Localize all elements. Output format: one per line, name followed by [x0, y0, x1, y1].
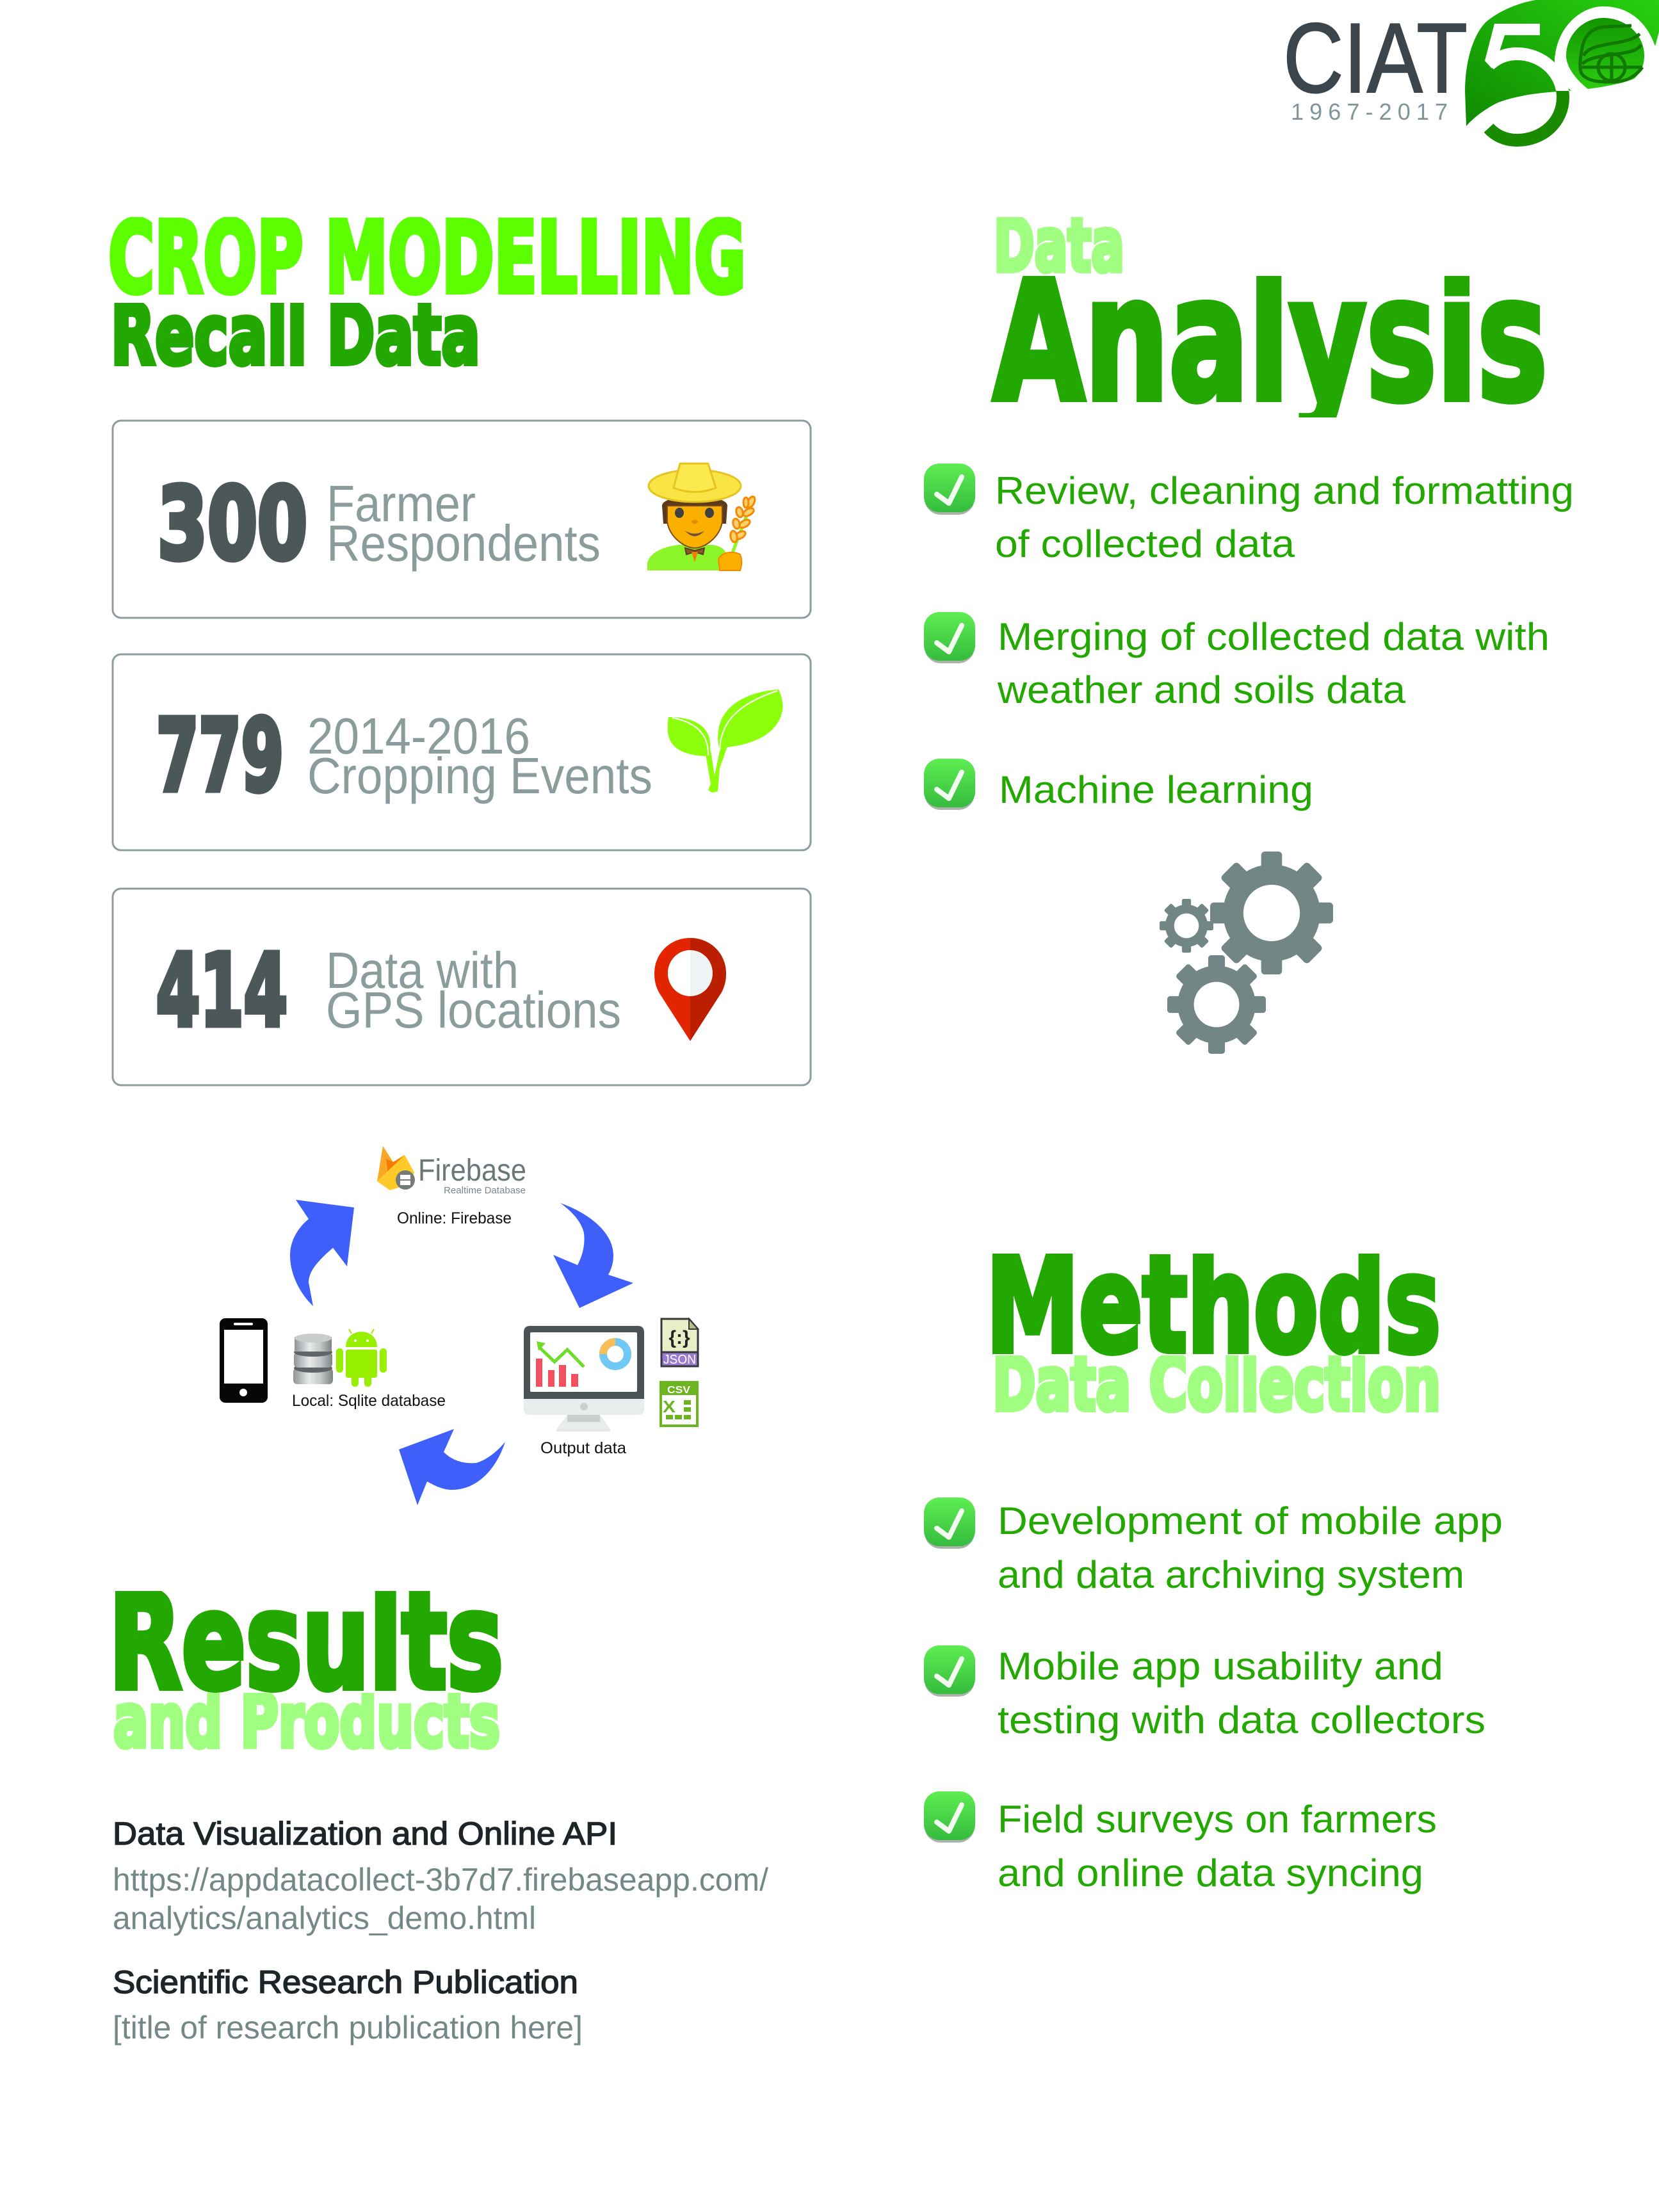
icon: Firebase flame — [377, 1146, 415, 1190]
heading: Methods Data Collection — [992, 1254, 1439, 1414]
icon: farmer — [647, 464, 756, 570]
item: field surveys: Field surveys on farmers — [998, 1798, 1437, 1841]
link text: https://appdatacollect-3b7d7.firebaseapp.com/ — [113, 1862, 768, 1898]
icon: map pin — [654, 938, 726, 1041]
logo five bowl — [1489, 54, 1563, 140]
heading line: Data: Data — [994, 202, 1124, 289]
icon: database — [293, 1334, 333, 1384]
icon: sprout — [668, 690, 783, 793]
icon: monitor with charts — [524, 1326, 644, 1432]
item: machine learning: Machine learning — [999, 768, 1313, 811]
logo five stem — [1485, 24, 1540, 69]
arrow: output to local — [399, 1429, 505, 1505]
heading: Results and Products — [114, 1591, 501, 1750]
icon: phone — [220, 1318, 268, 1403]
caption: Online Firebase: Online: Firebase — [397, 1209, 512, 1227]
icon: JSON file — [661, 1319, 698, 1367]
icon: CSV file: CSV — [667, 1385, 690, 1396]
item: usability — [924, 1645, 1485, 1741]
icon: CSV file — [661, 1382, 697, 1426]
panel: GPS data — [113, 889, 811, 1085]
subheading: data visualization: Data Visualization and Online API — [113, 1816, 617, 1852]
list: data collection steps — [924, 1498, 1503, 1894]
item: development: and data archiving system — [998, 1553, 1464, 1596]
heading line: Data Collection: Data Collection — [992, 1341, 1441, 1428]
heading: Crop Modelling Recall Data — [109, 217, 743, 367]
label: 2014-2016 Cropping Events — [307, 707, 652, 804]
label: Data with GPS locations: Data with — [326, 942, 519, 999]
item: usability: Mobile app usability and — [998, 1645, 1443, 1688]
heading line: Results: Results — [109, 1565, 503, 1720]
item: review: of collected data — [995, 522, 1295, 565]
label: 2014-2016 Cropping Events: Cropping Events — [307, 747, 652, 804]
icon: android — [336, 1329, 387, 1387]
Realtime Database caption: Realtime Database — [444, 1185, 526, 1196]
diagram: data flow cycle — [220, 1146, 698, 1505]
logo globe — [1580, 26, 1642, 82]
item: machine learning — [924, 759, 1313, 811]
item: merging: weather and soils data — [997, 668, 1406, 711]
logo zero ring — [1555, 6, 1655, 92]
label: Farmer Respondents: Respondents — [327, 515, 601, 572]
number 779: 779 — [156, 698, 284, 814]
subheading: publication: Scientific Research Publication — [113, 1964, 578, 2000]
item: field surveys: and online data syncing — [998, 1852, 1423, 1894]
icon: JSON file: JSON — [663, 1353, 696, 1367]
heading line: CROP MODELLING: CROP MODELLING — [108, 201, 746, 316]
label: Farmer Respondents: Farmer — [327, 475, 476, 532]
number 414: 414 — [156, 933, 287, 1049]
heading line: Recall Data: Recall Data — [111, 286, 480, 383]
item: merging — [924, 612, 1550, 711]
number 300: 300 — [158, 466, 307, 582]
item: review — [924, 464, 1574, 565]
panel: cropping events — [113, 654, 811, 850]
label: Farmer Respondents — [327, 475, 601, 572]
heading line: and Products: and Products — [113, 1678, 500, 1764]
icon: CSV file: X — [663, 1397, 676, 1416]
icon: JSON file: {:} — [668, 1327, 690, 1348]
publication placeholder: [title of research publication here] — [113, 2010, 583, 2046]
logo years: 1967-2017 — [1291, 99, 1448, 125]
arrow: online to output — [553, 1203, 633, 1308]
label: Data with GPS locations — [326, 942, 621, 1038]
link text — [113, 1862, 768, 1936]
Firebase wordmark: Firebase — [418, 1154, 526, 1188]
text block: results and publication — [113, 1816, 768, 2046]
item: field surveys — [924, 1791, 1437, 1894]
item: review: Review, cleaning and formatting — [995, 469, 1574, 512]
item: merging: Merging of collected data with — [998, 615, 1550, 658]
logo wordmark: CIAT — [1283, 3, 1468, 113]
label: Data with GPS locations: GPS locations — [326, 981, 621, 1038]
item: development: Development of mobile app — [998, 1499, 1503, 1542]
logo leaf — [1465, 0, 1659, 126]
logo: CIAT 50 — [1283, 0, 1659, 140]
heading line: Methods: Methods — [986, 1228, 1441, 1383]
link text: analytics/analytics_demo.html — [113, 1900, 536, 1936]
panel: farmer respondents — [113, 421, 811, 618]
caption: Local Sqlite: Local: Sqlite database — [292, 1392, 446, 1410]
item: usability: testing with data collectors — [998, 1699, 1485, 1741]
icon: gears — [1160, 852, 1333, 1054]
heading: Data Analysis — [991, 217, 1544, 417]
label: 2014-2016 Cropping Events: 2014-2016 — [307, 707, 530, 764]
caption: Output data: Output data — [540, 1439, 626, 1457]
arrow: local to online — [290, 1200, 354, 1306]
item: development — [924, 1498, 1503, 1596]
logo inner leaf — [1566, 18, 1644, 89]
logo five bowl lower — [1484, 91, 1569, 147]
list: data analysis steps — [924, 464, 1574, 811]
